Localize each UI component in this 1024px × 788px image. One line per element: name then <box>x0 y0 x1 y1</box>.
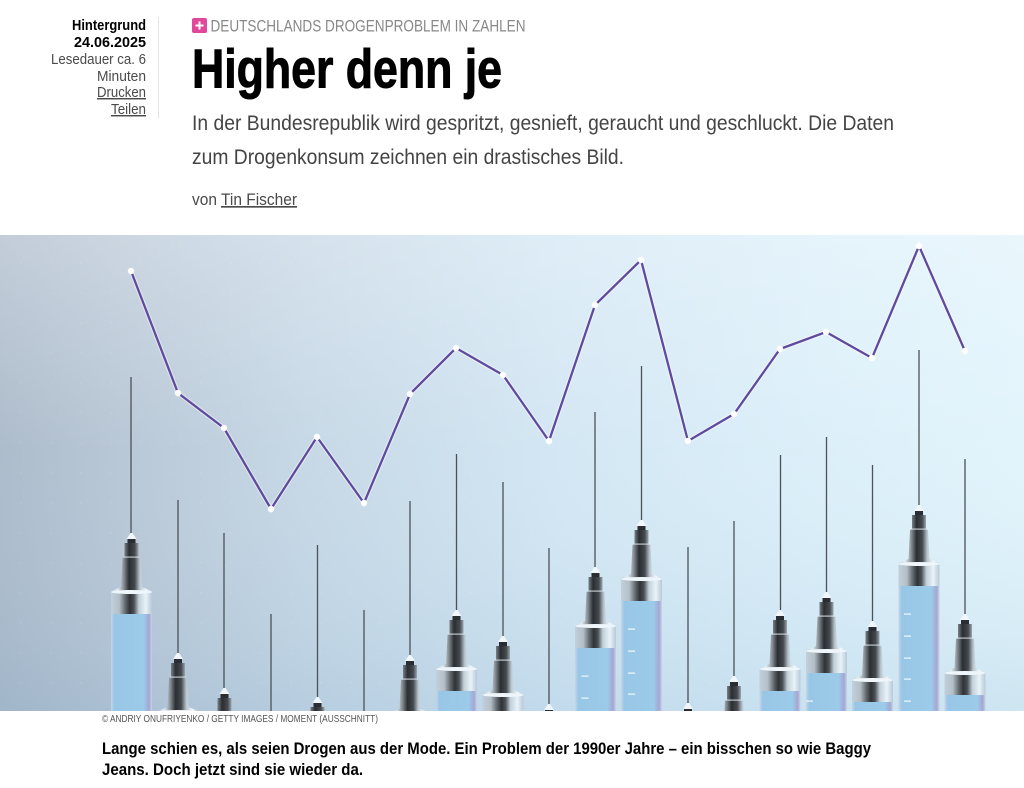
byline <box>192 191 297 209</box>
meta: reading time: Lesedauer ca. 6 <box>51 52 146 68</box>
scale ticks <box>582 614 911 702</box>
meta: category: Hintergrund <box>72 18 146 34</box>
link: print: Drucken <box>97 85 146 101</box>
meta: reading time continued: Minuten <box>97 69 146 85</box>
intro text <box>192 111 894 169</box>
link: share: Teilen <box>111 102 146 118</box>
syringe barrels <box>111 586 986 711</box>
lead paragraph: Lange schien es, als seien Drogen aus der Mode. Ein Problem der 1990er Jahre – ein bisschen so wie Baggy <box>102 739 871 758</box>
needles <box>131 350 965 711</box>
kicker text: DEUTSCHLANDS DROGENPROBLEM IN ZAHLEN <box>210 18 526 36</box>
kicker with plus badge <box>192 18 526 36</box>
image credit: © ANDRIY ONUFRIYENKO / GETTY IMAGES / MOMENT (AUSSCHNITT) <box>102 713 378 725</box>
byline: von <box>192 191 217 209</box>
intro text: In der Bundesrepublik wird gespritzt, gesnieft, geraucht und geschluckt. Die Daten <box>192 111 894 135</box>
syringes <box>111 505 986 711</box>
lead paragraph: Jeans. Doch jetzt sind sie wieder da. <box>102 760 363 779</box>
title: Higher denn je <box>192 38 502 100</box>
data points <box>128 243 968 512</box>
byline: Tin Fischer <box>221 191 297 209</box>
article meta sidebar <box>51 18 146 118</box>
intro text: zum Drogenkonsum zeichnen ein drastisches Bild. <box>192 145 624 169</box>
icon: plus badge <box>192 18 207 33</box>
lead paragraph <box>102 739 871 779</box>
hero image: syringes and line chart <box>0 235 1024 711</box>
line chart <box>128 243 968 512</box>
meta: date: 24.06.2025 <box>74 35 146 51</box>
